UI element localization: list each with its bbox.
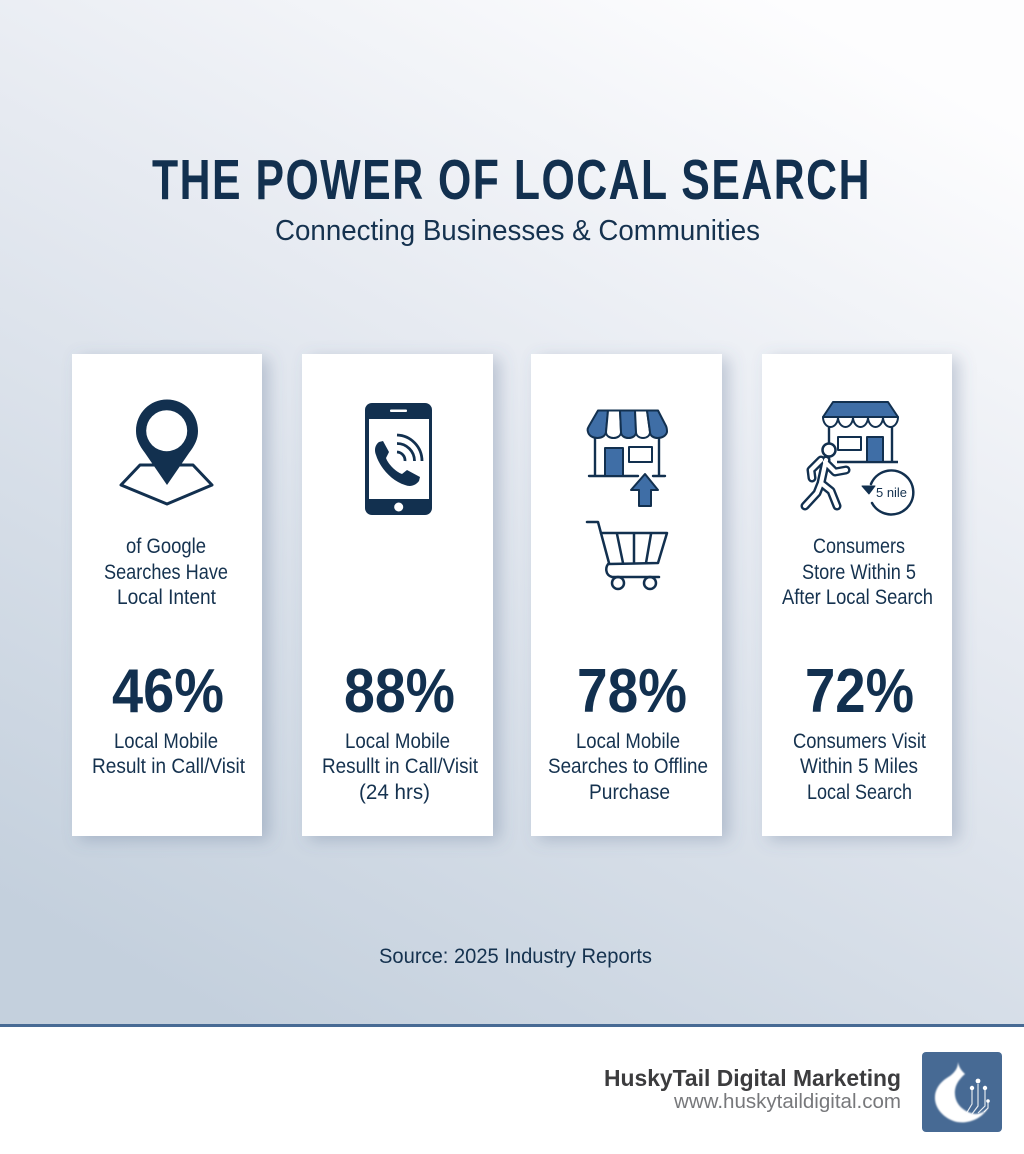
- description: Store Within 5: [802, 561, 916, 584]
- panel: offline purchase: [531, 354, 722, 836]
- card background: [762, 354, 952, 836]
- caption: Consumers Visit: [793, 730, 926, 753]
- company name: HuskyTail Digital Marketing: [604, 1065, 901, 1091]
- icon: storefront with arrow: [588, 410, 667, 506]
- panel: call or visit: [302, 354, 493, 836]
- icon: store with walking person and 5 mile radius: 5 nile: [876, 485, 907, 500]
- caption: Local Mobile: [345, 730, 450, 753]
- caption: Within 5 Miles: [800, 755, 918, 778]
- card background: [72, 354, 262, 836]
- description: of Google: [126, 535, 206, 558]
- icon: map pin: [121, 400, 212, 504]
- description: [782, 535, 933, 609]
- footer rule: [0, 1024, 1024, 1027]
- card background: [302, 354, 493, 836]
- statistic: 46%: 46%: [112, 657, 224, 726]
- panel: store visit: [762, 354, 952, 836]
- source note: Source: 2025 Industry Reports: [379, 945, 652, 968]
- description: After Local Search: [782, 586, 933, 609]
- icon: smartphone with call: [365, 403, 432, 515]
- caption: (24 hrs): [359, 781, 430, 804]
- website: www.huskytaildigital.com: [673, 1091, 901, 1113]
- icon: store with walking person and 5 mile radius: [805, 402, 913, 514]
- statistic: 88%: 88%: [344, 657, 455, 726]
- caption: Local Search: [807, 781, 912, 804]
- description: Local Intent: [117, 586, 216, 609]
- caption: [548, 730, 708, 804]
- caption: Local Mobile: [576, 730, 680, 753]
- caption: Purchase: [589, 781, 670, 804]
- description: [104, 535, 228, 609]
- statistic: 78%: 78%: [577, 657, 687, 726]
- subtitle: Connecting Businesses & Communities: [275, 215, 760, 247]
- caption: Resullt in Call/Visit: [322, 755, 478, 778]
- statistic: 72%: 72%: [805, 657, 914, 726]
- caption: [322, 730, 478, 804]
- caption: Local Mobile: [114, 730, 218, 753]
- description: Searches Have: [104, 561, 228, 584]
- card background: [531, 354, 722, 836]
- caption: Result in Call/Visit: [92, 755, 245, 778]
- description: Consumers: [813, 535, 905, 558]
- footer background: [0, 1024, 1024, 1154]
- icon: shopping cart: [587, 522, 667, 589]
- caption: Searches to Offline: [548, 755, 708, 778]
- panel: local intent: [72, 354, 262, 836]
- caption: [793, 730, 926, 804]
- caption: [92, 730, 245, 778]
- logo: [922, 1052, 1002, 1132]
- footer: [0, 1024, 1024, 1154]
